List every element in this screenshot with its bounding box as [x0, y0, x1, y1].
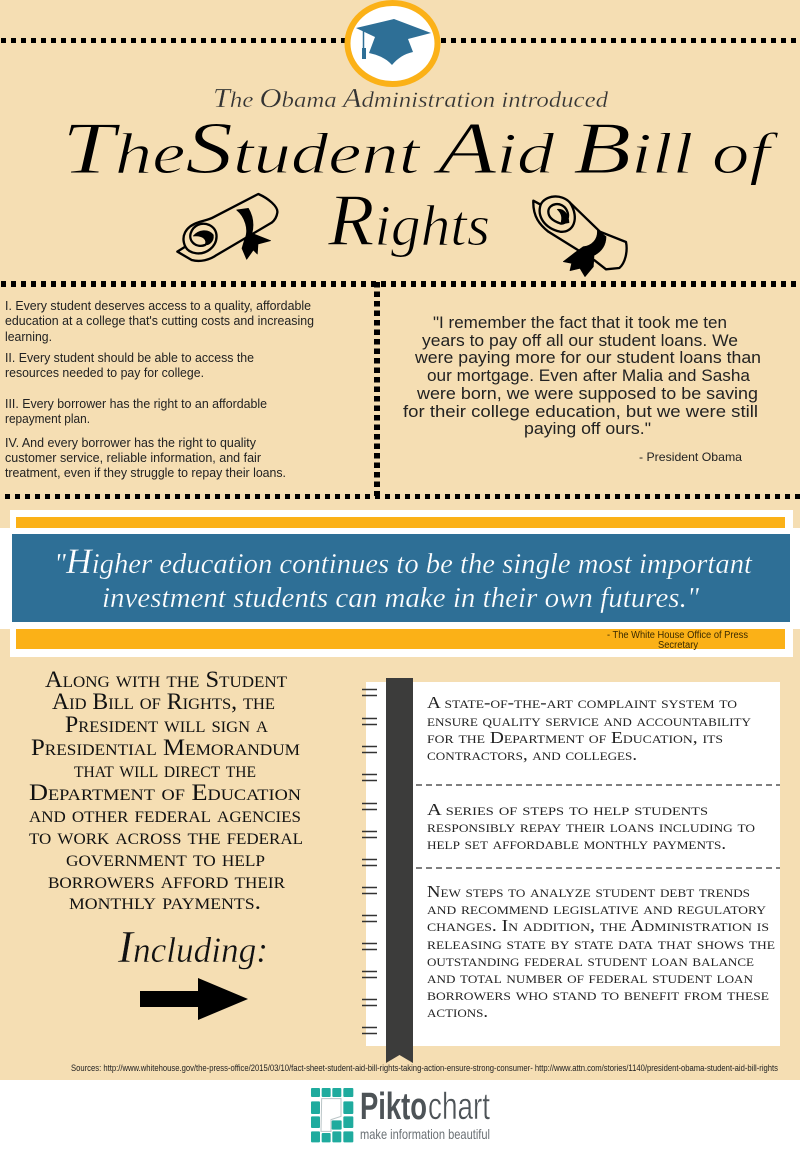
piktochart wordmark: chart: [428, 1086, 490, 1128]
banner quote text: [54, 541, 753, 614]
action: repayment steps: help set affordable monthly payments.: [427, 834, 726, 853]
notebook rings: [362, 690, 377, 1034]
action: debt trend analysis: and recommend legislative and regulatory: [427, 899, 766, 918]
text block: presidential memorandum: Along with the Student: [45, 667, 287, 692]
banner credit: - The White House Office of Press: [607, 630, 748, 641]
piktochart tagline: make information beautiful: [360, 1126, 490, 1142]
title: [62, 108, 779, 262]
banner credit: Secretary: [658, 640, 698, 651]
icon: right diploma scroll: [533, 196, 627, 277]
action: complaint system: ensure quality service and accountability: [427, 711, 751, 730]
action: complaint system: contractors, and colleges.: [427, 745, 637, 764]
text block: list of rights: resources needed to pay for college.: [5, 366, 204, 380]
action: debt trend analysis: actions.: [427, 1002, 488, 1021]
panel: notebook of actions: [362, 678, 780, 1063]
text block: list of rights: I. Every student deserves access to a quality, affordable: [5, 299, 311, 313]
action: complaint system: [427, 693, 751, 764]
horizontal dotted divider: [1, 281, 800, 287]
quote: President Obama: for their college education, but we were still: [403, 403, 758, 421]
text block: list of rights: treatment, even if they struggle to repay their loans.: [5, 466, 286, 480]
action: debt trend analysis: outstanding federal student loan balance: [427, 951, 754, 970]
text block: presidential memorandum: [29, 667, 303, 914]
icon: piktochart logo: [311, 1088, 353, 1142]
title: Rights: [327, 180, 490, 262]
text block: list of rights: III. Every borrower has the right to an affordable: [5, 397, 267, 411]
arrow: [140, 978, 248, 1020]
action: debt trend analysis: releasing state by state data that shows the: [427, 934, 775, 953]
horizontal dotted divider lower: [5, 494, 800, 499]
action: debt trend analysis: New steps to analyze student debt trends: [427, 882, 750, 901]
text block: list of rights: education at a college that's cutting costs and increasing: [5, 314, 314, 328]
quote: President Obama: were paying more for our student loans than: [414, 349, 761, 367]
text block: list of rights: IV. And every borrower has the right to quality: [5, 436, 257, 450]
text block: presidential memorandum: and other federal agencies: [29, 802, 301, 827]
quote: President Obama: "I remember the fact that it took me ten: [433, 314, 727, 332]
text block: presidential memorandum: to work across the federal: [29, 824, 303, 849]
action dividers: [416, 785, 780, 868]
action: repayment steps: [427, 800, 755, 853]
text block: list of rights: customer service, reliable information, and fair: [5, 451, 261, 465]
action: repayment steps: A series of steps to help students: [427, 800, 708, 819]
title: TheStudent Aid Bill of: [62, 108, 779, 190]
quote: President Obama: paying off ours.": [524, 420, 651, 438]
text block: presidential memorandum: monthly payments.: [69, 889, 261, 914]
text block: presidential memorandum: that will direct the: [74, 757, 256, 782]
banner quote text: investment students can make in their own futures.": [102, 582, 700, 614]
action: complaint system: A state-of-the-art complaint system to: [427, 693, 737, 712]
text block: list of rights: II. Every student should be able to access the: [5, 351, 254, 365]
icon: left diploma scroll: [177, 194, 277, 261]
action: debt trend analysis: changes. In addition, the Administration is: [427, 916, 769, 935]
top dotted divider: [1, 38, 800, 43]
action: debt trend analysis: and total number of federal student loan: [427, 968, 753, 987]
heading: including: Including:: [117, 921, 268, 972]
quote: President Obama: years to pay off all our student loans. We: [422, 332, 738, 350]
quote: President Obama: our mortgage. Even after Malia and Sasha: [427, 367, 751, 385]
text block: presidential memorandum: Presidential Memorandum: [31, 735, 300, 760]
footer band: [0, 1080, 800, 1153]
text block: presidential memorandum: Aid Bill of Rights, the: [52, 689, 275, 714]
text block: presidential memorandum: borrowers afford their: [48, 868, 285, 893]
action: debt trend analysis: borrowers who stand to benefit from these: [427, 985, 769, 1004]
text block: list of rights: [5, 299, 314, 480]
icon: graduation cap badge: [348, 3, 438, 84]
vertical dotted divider: [374, 282, 380, 496]
piktochart wordmark: Pikto: [360, 1086, 427, 1128]
subtitle: The Obama Administration introduced: [213, 83, 609, 113]
action: repayment steps: responsibly repay their loans including to: [427, 817, 755, 836]
banner credit: [607, 630, 748, 651]
quote: President Obama: were born, we were supposed to be saving: [416, 385, 758, 403]
text block: list of rights: learning.: [5, 330, 52, 344]
banner: white house quote: [0, 510, 800, 657]
text block: presidential memorandum: Department of Education: [29, 780, 301, 805]
action: complaint system: for the Department of Education, its: [427, 728, 723, 747]
text block: presidential memorandum: President will sign a: [65, 712, 268, 737]
action: debt trend analysis: [427, 882, 775, 1021]
quote: President Obama: - President Obama: [639, 450, 742, 464]
text block: list of rights: repayment plan.: [5, 412, 90, 426]
text block: presidential memorandum: government to help: [66, 846, 265, 871]
banner quote text: "Higher education continues to be the single most important: [54, 541, 753, 581]
quote: President Obama: [403, 314, 761, 464]
notebook spine: [386, 678, 413, 1063]
